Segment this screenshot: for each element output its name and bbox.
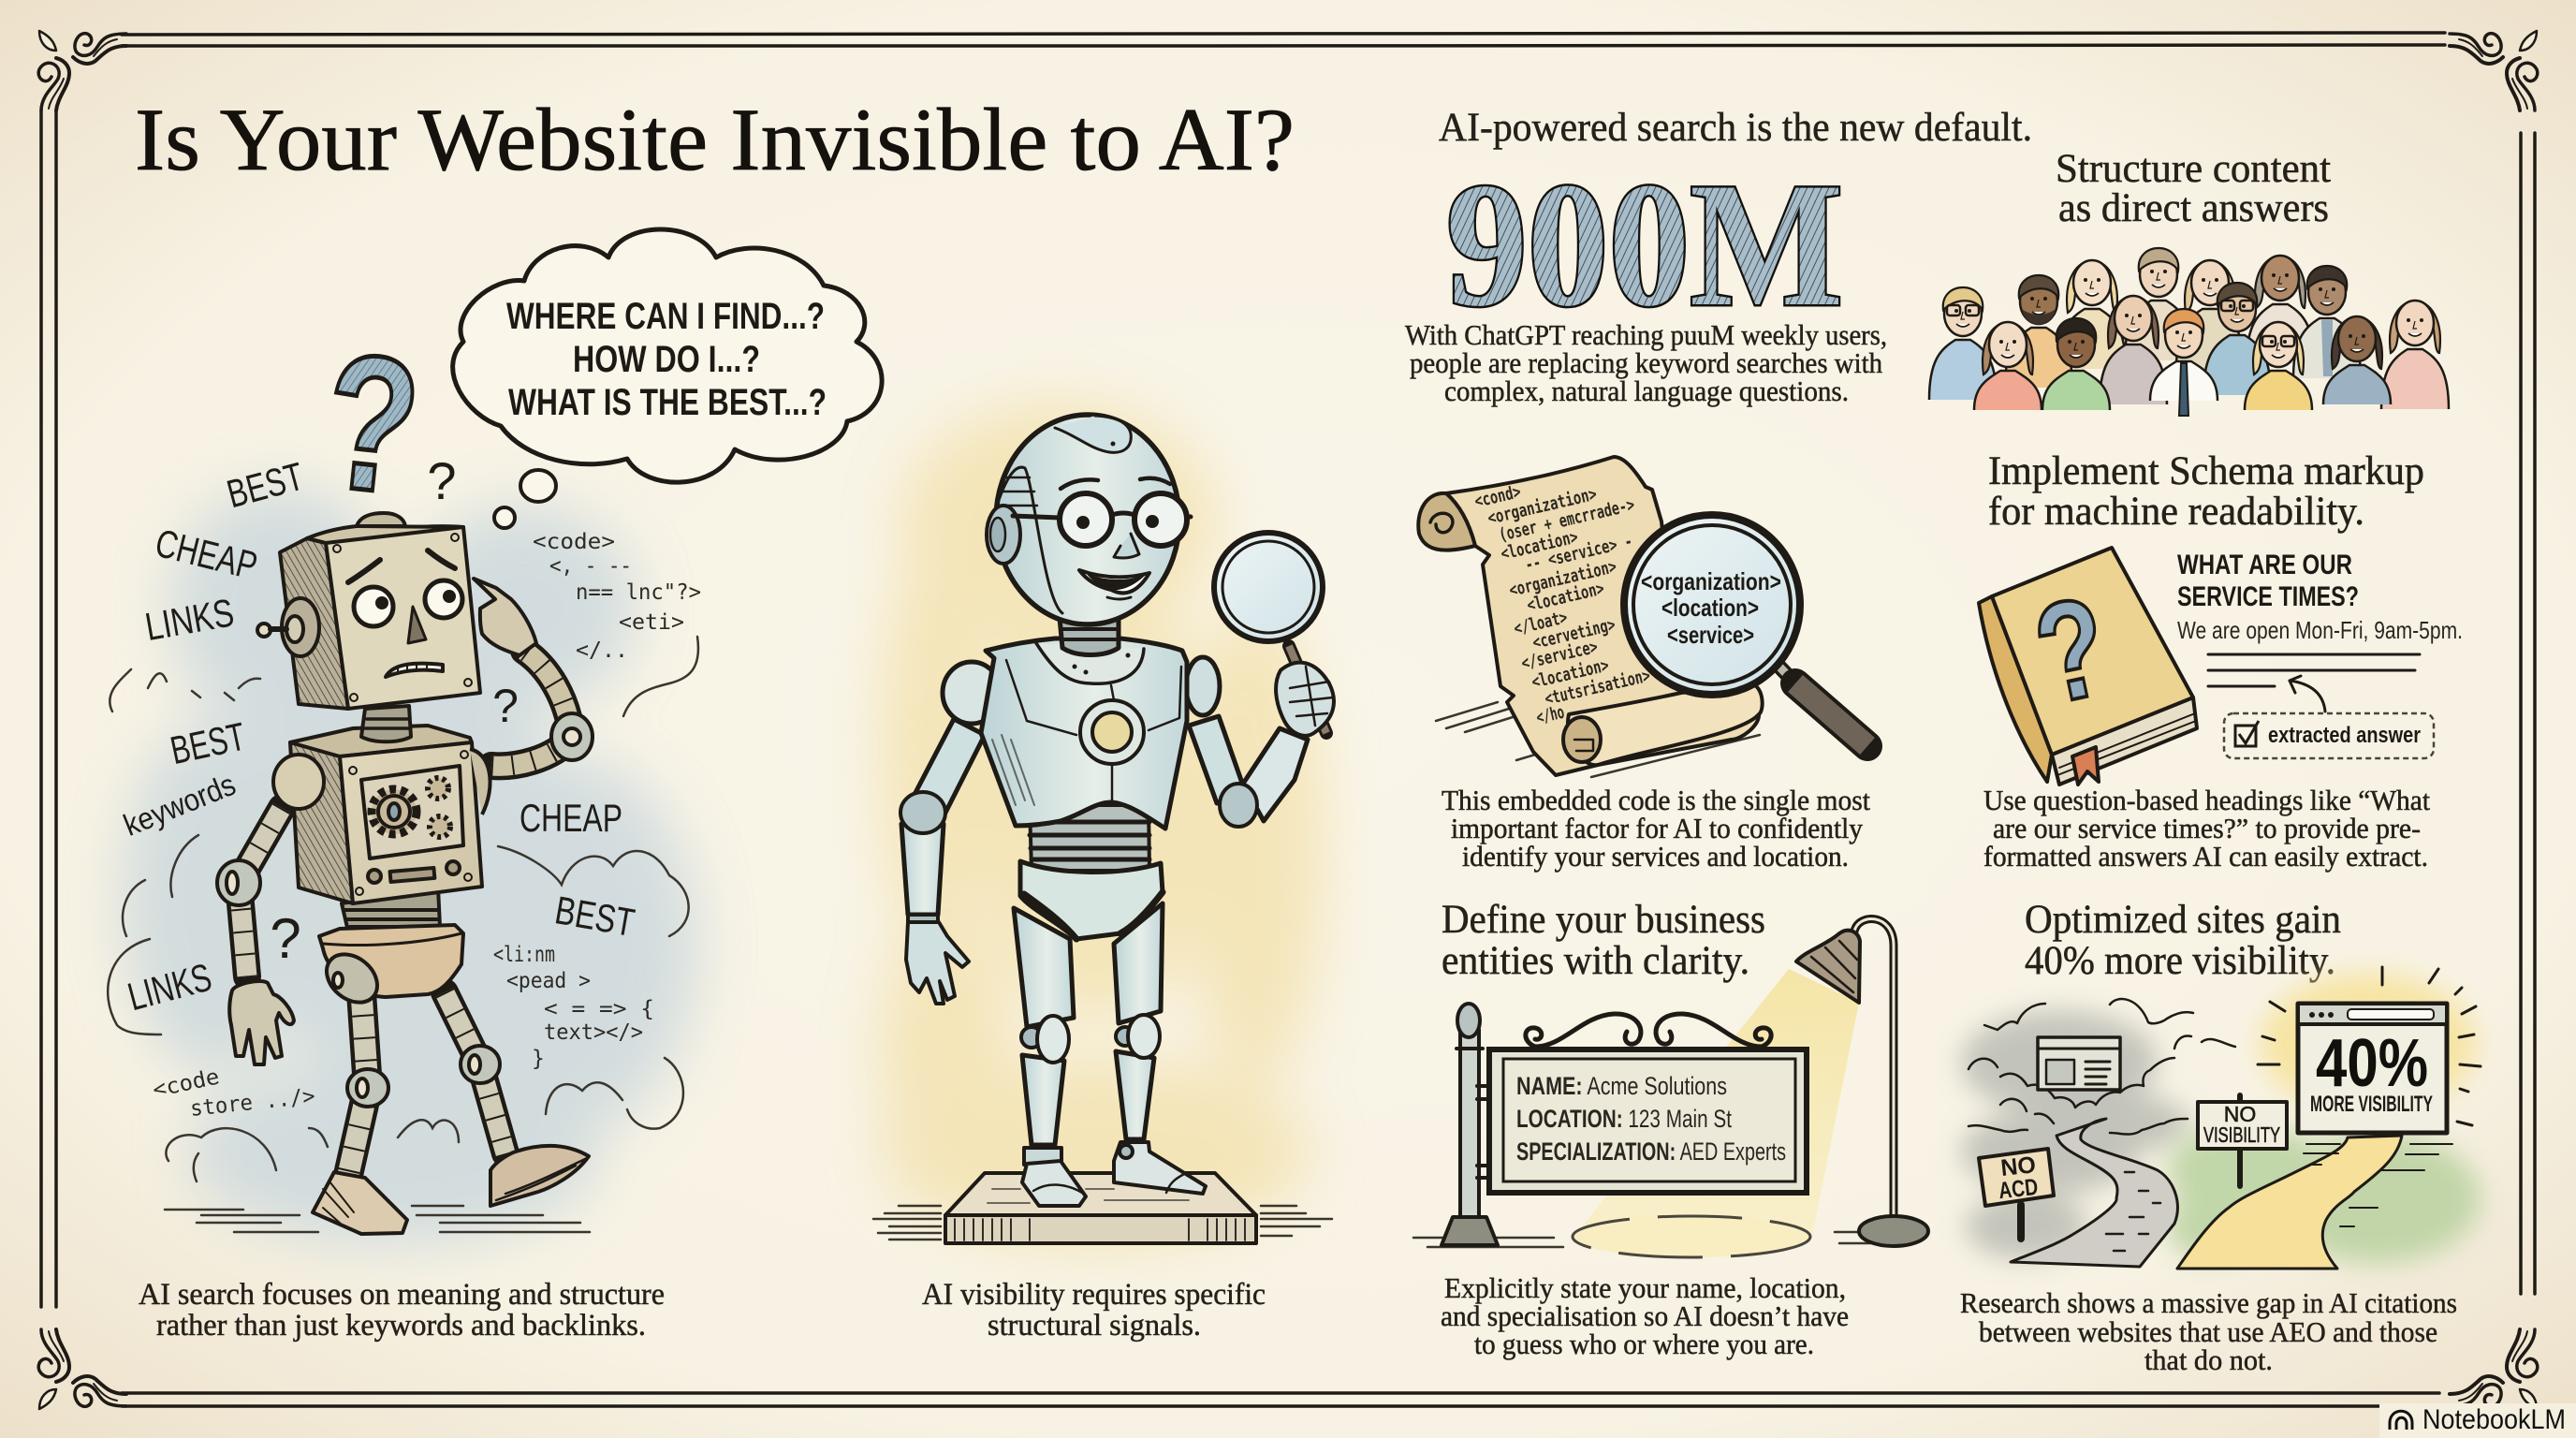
caption: embedded code: [1442, 784, 1870, 873]
sign: no ACD: [1979, 1149, 2054, 1239]
illustration: question book: [1979, 548, 2197, 785]
illustration: crowd of people: [1929, 248, 2449, 416]
heading: new default: AI-powered search is the new default.: [1439, 106, 2032, 150]
sign: no visibility: VISIBILITY: [2203, 1123, 2280, 1147]
browser window: 40%: MORE VISIBILITY: [2310, 1092, 2433, 1117]
torso: [273, 726, 490, 903]
floating keywords: LINKS: [142, 590, 237, 649]
caption: research: between websites that use AEO and those: [1979, 1315, 2437, 1348]
floating keywords: CHEAP: [151, 521, 262, 588]
heading: schema markup: [1988, 449, 2424, 534]
heading: structure content: Structure content: [2056, 147, 2331, 191]
thought bubbles: [494, 470, 556, 528]
caption: research: [1960, 1286, 2457, 1376]
panel: confused robot illustration: [108, 229, 882, 1245]
text: ChatGPT paragraph: [1405, 318, 1887, 407]
browser window: 40%: [2298, 1004, 2447, 1133]
icon: NotebookLM logo: [2390, 1411, 2412, 1430]
scroll code lines: <cond>: [1472, 481, 1523, 512]
heading: structure content: as direct answers: [2058, 186, 2329, 230]
speech cloud: WHERE CAN I FIND...?: [506, 296, 825, 337]
scroll code lines: -- <service> -: [1523, 531, 1634, 576]
ground hatching: [1413, 1232, 1872, 1247]
scroll paper: [1418, 457, 1763, 775]
browser window: 40%: 40%: [2316, 1026, 2428, 1101]
scroll code lines: <cerveting>: [1530, 614, 1617, 653]
sign board: SPECIALIZATION: AED Experts: [1516, 1137, 1786, 1166]
floating code snippets: <code: [151, 1064, 222, 1103]
heading: define entities: Define your business: [1442, 898, 1765, 942]
illustration: lit signpost and lamp: [1413, 918, 1928, 1257]
caption: explicitly state: to guess who or where you are.: [1474, 1328, 1814, 1360]
ground hatching: [165, 1206, 590, 1232]
neck: [1060, 618, 1119, 655]
hand on head: [474, 579, 536, 655]
magnifier handle: [1778, 665, 1867, 746]
icon: checkbox: [2235, 721, 2259, 746]
floating keywords: BEST: [552, 888, 637, 945]
scroll code lines: [1472, 481, 1652, 728]
floating keywords: [119, 454, 637, 1019]
caption: research: that do not.: [2144, 1343, 2273, 1376]
big stat: 900M: 900M: [1446, 147, 1843, 344]
speech cloud: [453, 229, 882, 482]
scroll code lines: <location>: [1499, 527, 1580, 565]
floating code snippets: <li:nm: [493, 943, 555, 967]
post: [1442, 1004, 1498, 1245]
illustration: two roads: [1961, 967, 2481, 1269]
illustration: code scroll with magnifier: [1418, 457, 1867, 777]
caption: AI visibility: structural signals.: [988, 1309, 1201, 1343]
floating keywords: BEST: [167, 714, 249, 772]
floating code snippets: <code>: [533, 530, 615, 554]
shadow hatching: [1436, 702, 1760, 777]
watercolour washes: [1961, 974, 2481, 1264]
FAQ text: [2177, 550, 2463, 644]
caption: question headings: Use question-based headings like “What: [1983, 784, 2430, 816]
heading: schema markup: for machine readability.: [1988, 490, 2364, 534]
floating code snippets: < = => {: [544, 997, 654, 1021]
heading: optimized sites: 40% more visibility.: [2025, 939, 2335, 983]
scroll code lines: <tutsrisation>: [1543, 666, 1652, 710]
floating code snippets: <pead >: [506, 969, 591, 993]
caption: AI search: AI search focuses on meaning and structure: [139, 1278, 665, 1312]
caption: question headings: are our service times?” to provide pre-: [1993, 812, 2421, 844]
sign board: [1489, 1049, 1807, 1193]
small question marks: ?: [270, 907, 301, 970]
title: Is Your Website Invisible to AI?: [135, 90, 1295, 189]
text: ChatGPT paragraph: complex, natural language questions.: [1444, 374, 1849, 407]
panel: confident robot illustration: [873, 403, 1334, 1245]
head: [257, 513, 480, 709]
arms: [900, 657, 1308, 1004]
floating code snippets: <, - --: [549, 554, 632, 579]
abdomen: [1020, 805, 1163, 939]
back leg: [445, 992, 589, 1206]
small question marks: ?: [492, 680, 519, 732]
scroll code lines: </loat>: [1512, 607, 1570, 639]
scroll code lines: <organization>: [1486, 484, 1599, 529]
caption: explicitly state: and specialisation so AI doesn’t have: [1441, 1299, 1849, 1332]
caption: embedded code: This embedded code is the single most: [1442, 784, 1870, 816]
ground hatching: [873, 1206, 1332, 1240]
fog clouds: [1969, 999, 2235, 1135]
heading: define entities: [1442, 898, 1765, 983]
FAQ text: We are open Mon-Fri, 9am-5pm.: [2177, 616, 2463, 644]
raised arm: [491, 651, 593, 766]
callout: extracted answer: extracted answer: [2268, 723, 2421, 748]
small question marks: ?: [427, 451, 457, 510]
grey road: [2011, 1119, 2177, 1267]
road pebbles: [2106, 1172, 2160, 1251]
floating code snippets: n== lnc"?>: [576, 580, 701, 605]
magnifier lens: [1624, 515, 1800, 695]
caption: AI search: rather than just keywords and backlinks.: [156, 1309, 646, 1343]
yellow watercolour wash: [880, 403, 1325, 1245]
scroll code lines: </ho: [1534, 702, 1566, 728]
sign scrollwork: [1526, 1014, 1771, 1047]
speech cloud: WHAT IS THE BEST...?: [508, 382, 827, 423]
floating code snippets: }: [532, 1047, 545, 1071]
NotebookLM badge: [2379, 1403, 2576, 1438]
scroll code lines: (oser + emcrrade->: [1497, 494, 1636, 546]
hanging arm: [217, 808, 294, 1064]
arrow: to answer: [2290, 676, 2325, 712]
front leg: [313, 992, 407, 1234]
caption: embedded code: important factor for AI to confidently: [1451, 812, 1863, 844]
floating code snippets: </..: [576, 638, 628, 663]
magnifier lens: <location>: [1661, 594, 1759, 622]
floating code snippets: [151, 530, 701, 1122]
light beam: [1573, 969, 1859, 1257]
answer lines: [2208, 654, 2420, 686]
scroll code lines: <location>: [1525, 579, 1606, 616]
small browser window: [2038, 1037, 2120, 1090]
heading: schema markup: Implement Schema markup: [1988, 449, 2424, 493]
lamp: [1796, 918, 1928, 1246]
scroll code lines: <location>: [1530, 655, 1611, 693]
blue watercolour wash: [122, 487, 697, 1245]
text: ChatGPT paragraph: With ChatGPT reaching puuM weekly users,: [1405, 318, 1887, 351]
sign: no visibility: NO: [2224, 1102, 2256, 1126]
big question mark: ?: [315, 313, 429, 535]
confused robot figure: [217, 513, 593, 1234]
floating keywords: LINKS: [124, 955, 216, 1019]
sun rays: [2258, 967, 2481, 1125]
neck: [361, 706, 411, 741]
heading: optimized sites: Optimized sites gain: [2025, 898, 2341, 942]
magnifier lens: <service>: [1667, 621, 1754, 649]
sign board: NAME: Acme Solutions: [1516, 1072, 1727, 1100]
scroll code lines: <organization>: [1507, 556, 1618, 601]
callout: extracted answer: [2224, 713, 2434, 758]
sketchy cloud lines: [108, 637, 698, 1181]
magnifier lens: <organization>: [1641, 567, 1781, 595]
waist and pelvis: [317, 888, 463, 1012]
small question marks: [270, 451, 519, 970]
sign board: LOCATION: 123 Main St: [1516, 1105, 1732, 1133]
caption: question headings: [1983, 784, 2430, 873]
floating code snippets: <eti>: [619, 610, 684, 635]
floating keywords: BEST: [223, 454, 308, 516]
text: ChatGPT paragraph: people are replacing keyword searches with: [1410, 346, 1882, 379]
floating keywords: keywords: [119, 767, 241, 843]
heading: define entities: entities with clarity.: [1442, 939, 1749, 983]
speech cloud: HOW DO I...?: [573, 339, 760, 380]
caption: explicitly state: [1441, 1271, 1849, 1360]
yellow road: [2177, 1136, 2402, 1269]
sign: no ACD: ACD: [1998, 1174, 2040, 1204]
green hatching: [2304, 1144, 2452, 1226]
FAQ text: SERVICE TIMES?: [2177, 581, 2359, 612]
scroll code lines: </service>: [1519, 637, 1600, 674]
caption: AI visibility: AI visibility requires specific: [922, 1278, 1266, 1312]
caption: embedded code: identify your services and location.: [1462, 840, 1849, 873]
raised magnifying glass: [1214, 533, 1334, 736]
head: [987, 415, 1191, 624]
caption: explicitly state: Explicitly state your name, location,: [1444, 1271, 1846, 1304]
floating keywords: CHEAP: [520, 796, 622, 840]
caption: AI search: [139, 1278, 665, 1343]
floating code snippets: store ../>: [189, 1084, 316, 1122]
sign: no ACD: NO: [1999, 1152, 2037, 1181]
illustration: question book: ?: [2023, 565, 2121, 734]
heading: optimized sites: [2025, 898, 2341, 983]
FAQ text: WHAT ARE OUR: [2177, 550, 2352, 580]
caption: question headings: formatted answers AI can easily extract.: [1983, 840, 2428, 873]
pedestal: [945, 1173, 1256, 1243]
floating code snippets: text></>: [544, 1020, 643, 1045]
sign: no visibility: [2198, 1095, 2287, 1186]
chest: [981, 638, 1187, 829]
caption: research: Research shows a massive gap in AI citations: [1960, 1286, 2457, 1319]
heading: structure content: [2056, 147, 2331, 230]
caption: AI visibility: [922, 1278, 1266, 1343]
legs: [1014, 903, 1206, 1206]
